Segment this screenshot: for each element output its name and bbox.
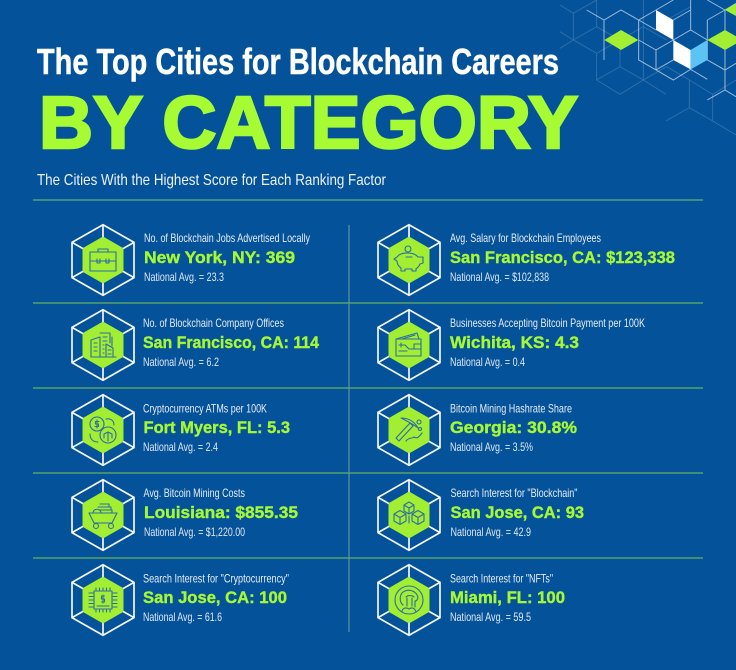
panel: search cryptocurrency, San Jose: San Jose, CA: 100 (143, 588, 287, 607)
panel: mining costs, Louisiana (72, 480, 298, 550)
panel: company offices, San Francisco: National Avg. = 6.2 (143, 355, 219, 369)
panel: search NFTs, Miami: Miami, FL: 100 (450, 588, 565, 607)
panel: search NFTs, Miami: Search Interest for "NFTs" (450, 572, 553, 586)
icon: connected blocks (378, 480, 440, 550)
panel: company offices, San Francisco: San Francisco, CA: 114 (143, 333, 320, 352)
panel: businesses accepting bitcoin, Wichita: Wichita, KS: 4.3 (450, 333, 579, 352)
panel: ATMs, Fort Myers: Cryptocurrency ATMs per 100K (143, 402, 267, 416)
icon: piggy bank (378, 225, 440, 295)
panel: salary, San Francisco: San Francisco, CA: $123,338 (450, 248, 675, 267)
panel: businesses accepting bitcoin, Wichita: National Avg. = 0.4 (450, 355, 525, 369)
panel: mining costs, Louisiana: Avg. Bitcoin Mining Costs (144, 486, 245, 500)
panel: jobs advertised, New York (72, 225, 310, 295)
heading: by category: BY CATEGORY (39, 81, 578, 164)
panel: search blockchain, San Jose: National Avg. = 42.9 (450, 525, 531, 539)
subtitle: The Cities With the Highest Score for Each Ranking Factor (37, 172, 387, 189)
panel: ATMs, Fort Myers (72, 395, 290, 465)
decorative hexagon network, top right (560, 0, 736, 135)
title: The Top Cities for Blockchain Careers (37, 41, 559, 82)
icon: mining cart (72, 480, 134, 550)
panel: ATMs, Fort Myers: Fort Myers, FL: 5.3 (144, 418, 290, 437)
panel: hashrate share, Georgia (378, 395, 577, 465)
panel: hashrate share, Georgia: Bitcoin Mining Hashrate Share (450, 402, 572, 416)
icon: microchip with dollar (72, 565, 134, 635)
panel: company offices, San Francisco: No. of Blockchain Company Offices (143, 316, 284, 330)
panel: search cryptocurrency, San Jose: Search Interest for "Cryptocurrency" (143, 572, 289, 586)
panel: salary, San Francisco: National Avg. = $102,838 (450, 270, 549, 284)
panel: mining costs, Louisiana: Louisiana: $855.35 (144, 503, 298, 522)
icon: wallet with circuit (378, 310, 440, 380)
panel: mining costs, Louisiana: National Avg. = $1,220.00 (144, 525, 245, 539)
panel: salary, San Francisco: Avg. Salary for Blockchain Employees (450, 231, 601, 245)
icon: briefcase (72, 225, 134, 295)
panel: jobs advertised, New York: National Avg. = 23.3 (144, 270, 224, 284)
icon: ape NFT coin (378, 565, 440, 635)
panel: ATMs, Fort Myers: National Avg. = 2.4 (143, 440, 218, 454)
panel: search cryptocurrency, San Jose (72, 565, 289, 635)
panel: businesses accepting bitcoin, Wichita (378, 310, 645, 380)
panel: search NFTs, Miami (378, 565, 565, 635)
panel: search NFTs, Miami: National Avg. = 59.5 (450, 610, 531, 624)
panel: hashrate share, Georgia: National Avg. = 3.5% (450, 440, 533, 454)
panel: search blockchain, San Jose (378, 480, 584, 550)
panel: jobs advertised, New York: No. of Blockchain Jobs Advertised Locally (144, 231, 310, 245)
panel: businesses accepting bitcoin, Wichita: Businesses Accepting Bitcoin Payment per 100K (450, 316, 645, 330)
panel: hashrate share, Georgia: Georgia: 30.8% (450, 418, 577, 437)
panel: search blockchain, San Jose: San Jose, CA: 93 (450, 503, 584, 522)
panel: salary, San Francisco (378, 225, 675, 295)
icon: pickaxe (378, 395, 440, 465)
icon: city buildings (72, 310, 134, 380)
icon: crypto exchange coins (72, 395, 134, 465)
panel: jobs advertised, New York: New York, NY: 369 (144, 248, 295, 267)
panel: search cryptocurrency, San Jose: National Avg. = 61.6 (143, 610, 222, 624)
panel: company offices, San Francisco (72, 310, 320, 380)
panel: search blockchain, San Jose: Search Interest for "Blockchain" (450, 486, 578, 500)
